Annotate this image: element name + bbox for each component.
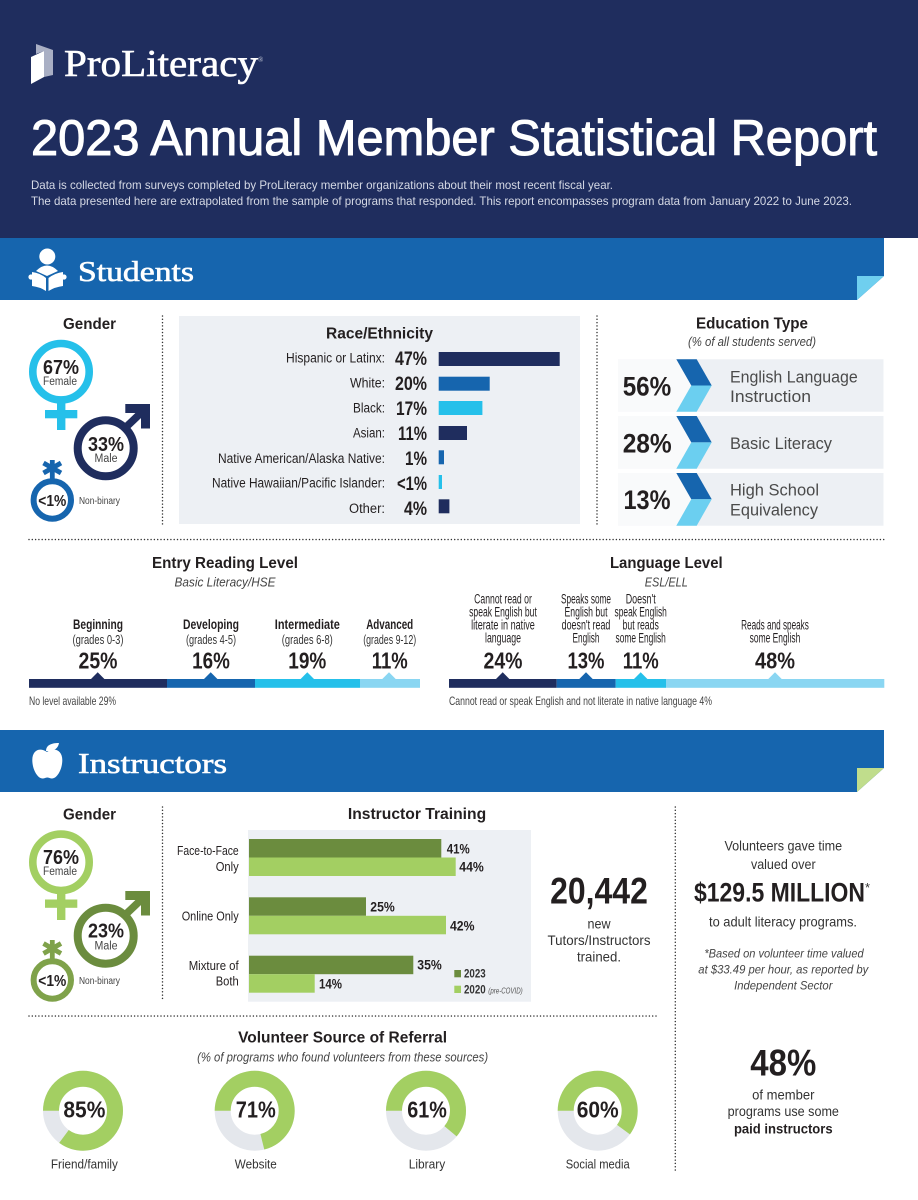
stat: volunteer value — [694, 838, 870, 992]
level descriptions: Doesn't — [626, 591, 656, 606]
panel: race and ethnicity chart — [179, 316, 580, 524]
row labels: Hispanic or Latinx: — [286, 351, 385, 366]
row values: 11% — [398, 424, 427, 445]
male symbol: Male — [94, 453, 118, 465]
row: High School Equivalency — [618, 473, 884, 526]
row labels: Native American/Alaska Native: — [218, 451, 385, 466]
row: Basic Literacy — [618, 416, 884, 469]
heading: Education Type — [696, 316, 808, 333]
donut: website: 71% — [236, 1096, 276, 1122]
male symbol: Male — [94, 940, 118, 952]
row: High School Equivalency: Equivalency — [730, 501, 818, 520]
donut: social media: 60% — [577, 1096, 619, 1122]
legend: 2023 — [464, 969, 486, 981]
donut: website: Website — [235, 1156, 277, 1171]
intro text: Data is collected from surveys completed by ProLiteracy member organizations about their most recent fiscal year. — [31, 178, 613, 192]
level descriptions: speak English but — [469, 604, 537, 619]
level labels: Advanced — [366, 616, 413, 632]
row values: 47% — [395, 349, 427, 370]
row: Basic Literacy: Basic Literacy — [730, 434, 832, 453]
row labels: Online Only — [182, 908, 239, 923]
level descriptions — [469, 591, 809, 645]
level descriptions: language — [485, 630, 521, 645]
bars — [249, 839, 456, 993]
level labels: Developing — [183, 616, 239, 632]
level descriptions: but reads — [623, 617, 659, 632]
level percentages — [78, 647, 408, 673]
row labels — [212, 351, 385, 516]
non-binary symbol: Non-binary — [79, 976, 120, 987]
bar values: 41% — [447, 841, 470, 856]
footnote: at $33.49 per hour, as reported by — [698, 962, 869, 976]
icon: apple — [32, 743, 62, 779]
bar values: 35% — [417, 958, 442, 973]
stat: paid instructors: 48% — [750, 1043, 816, 1084]
heading: Language Level — [610, 555, 723, 572]
row labels: White: — [350, 376, 385, 390]
heading: Race/Ethnicity — [326, 326, 433, 342]
female symbol: 67% — [43, 357, 79, 379]
level descriptions: Speaks some — [561, 591, 611, 606]
subtitle: (% of all students served) — [688, 334, 816, 349]
stat: paid instructors: of member — [752, 1086, 815, 1102]
level percentages: 11% — [623, 647, 659, 673]
row values: <1% — [397, 474, 427, 495]
panel: volunteer source of referral — [51, 1030, 630, 1171]
bar values: 44% — [459, 860, 484, 875]
bars — [439, 352, 560, 513]
donut: library: Library — [409, 1156, 446, 1171]
row: English Language Instruction: Instruction — [730, 387, 811, 406]
level percentages: 24% — [484, 647, 522, 673]
stat: volunteer value: Volunteers gave time — [724, 838, 842, 854]
stat: paid instructors — [728, 1043, 839, 1136]
level descriptions: doesn't read — [562, 617, 610, 632]
stat: volunteer value: valued over — [751, 856, 816, 872]
level descriptions: literate in native — [471, 617, 535, 632]
panel: student gender — [33, 316, 150, 519]
row values: 20% — [395, 374, 427, 395]
bar values: 25% — [370, 900, 395, 915]
level descriptions: Reads and speaks — [741, 617, 809, 632]
donut: social media — [566, 1079, 630, 1171]
donut: friend/family — [51, 1079, 118, 1171]
section banner: Instructors — [0, 730, 884, 792]
level labels: Intermediate — [275, 616, 340, 632]
stat: paid instructors: programs use some — [728, 1103, 839, 1119]
stat: volunteer value: * — [865, 880, 870, 895]
stat: tutors trained: new — [588, 915, 611, 931]
row labels: Mixture of — [189, 958, 239, 973]
row values — [395, 349, 427, 520]
level descriptions: speak English — [615, 604, 667, 619]
panel: entry reading level — [29, 555, 420, 708]
note: No level available 29% — [29, 694, 116, 708]
intro text — [31, 178, 852, 208]
subtitle: (% of programs who found volunteers from these sources) — [197, 1050, 488, 1065]
panel: instructor gender — [33, 806, 150, 999]
level percentages: 11% — [372, 647, 408, 673]
row values: 1% — [405, 449, 427, 470]
footnote: *Based on volunteer time valued — [704, 946, 864, 960]
row labels: Face-to-Face — [177, 843, 239, 858]
female symbol — [33, 834, 89, 920]
row: Basic Literacy: 28% — [623, 428, 672, 458]
donut: website — [223, 1079, 287, 1171]
intro text: The data presented here are extrapolated from the sample of programs that responded. This report encompasses program data from January 2022 to June 2023. — [31, 194, 852, 208]
female symbol — [33, 344, 89, 430]
row: High School Equivalency: 13% — [624, 485, 670, 515]
non-binary symbol: Non-binary — [79, 496, 120, 507]
stat: tutors trained: Tutors/Instructors — [548, 932, 650, 948]
male symbol: 33% — [88, 434, 124, 456]
male symbol — [78, 404, 150, 476]
heading: Gender — [63, 806, 116, 823]
non-binary symbol: <1% — [38, 973, 66, 990]
heading: Gender — [63, 316, 116, 333]
non-binary symbol — [34, 940, 120, 999]
icon: student reading — [28, 248, 67, 291]
male symbol — [78, 891, 150, 964]
bar values: 14% — [319, 977, 342, 992]
level descriptions: English but — [564, 604, 608, 619]
section banner: Students — [0, 238, 884, 300]
section heading: Students — [78, 256, 194, 288]
subtitle: ESL/ELL — [645, 575, 688, 590]
level labels — [72, 616, 416, 647]
segmented bar — [449, 672, 884, 688]
female symbol: Female — [43, 866, 77, 878]
stat: volunteer value: $129.5 MILLION — [694, 878, 865, 908]
legend: 2020 — [464, 984, 486, 996]
row: High School Equivalency: High School — [730, 481, 819, 500]
bar values: 42% — [450, 918, 474, 933]
row: English Language Instruction: English Language — [730, 367, 858, 386]
donut: library: 61% — [407, 1096, 447, 1122]
row labels: Black: — [353, 400, 385, 416]
row labels: Native Hawaiian/Pacific Islander: — [212, 476, 385, 490]
note: Cannot read or speak English and not literate in native language 4% — [449, 694, 712, 708]
non-binary symbol: <1% — [38, 493, 66, 510]
row values: 4% — [404, 499, 427, 520]
main title: 2023 Annual Member Statistical Report — [31, 110, 877, 166]
non-binary symbol — [34, 460, 120, 519]
panel: instructor training chart — [177, 806, 531, 1002]
stat: tutors trained: 20,442 — [550, 870, 648, 911]
level percentages: 19% — [288, 647, 326, 673]
section heading: Instructors — [78, 748, 227, 780]
row labels: Asian: — [353, 426, 385, 440]
icon: ProLiteracy book logo — [31, 44, 53, 84]
donut: friend/family: Friend/family — [51, 1156, 118, 1171]
level labels: Beginning — [73, 616, 123, 632]
donut: social media: Social media — [566, 1156, 630, 1171]
level descriptions: some English — [616, 630, 666, 645]
female symbol: Female — [43, 376, 77, 388]
level labels: (grades 6-8) — [282, 632, 333, 647]
level labels: (grades 9-12) — [363, 632, 416, 647]
heading: Instructor Training — [348, 806, 486, 823]
heading: Volunteer Source of Referral — [238, 1030, 447, 1047]
legend — [454, 969, 523, 996]
stat: tutors trained — [548, 870, 650, 965]
donut: library — [394, 1079, 458, 1171]
stat: paid instructors: paid instructors — [734, 1120, 833, 1136]
footnote — [698, 946, 869, 992]
footnote: Independent Sector — [734, 978, 833, 992]
level descriptions: some English — [750, 630, 800, 645]
row values: 17% — [396, 399, 427, 420]
bar values — [319, 841, 484, 992]
level percentages: 13% — [568, 647, 604, 673]
donut: friend/family: 85% — [63, 1096, 105, 1122]
row labels: Only — [216, 859, 239, 874]
registered mark: ® — [258, 56, 264, 64]
level labels: (grades 4-5) — [186, 632, 236, 647]
stat: tutors trained: trained. — [577, 949, 621, 965]
female symbol: 76% — [43, 847, 79, 869]
row: English Language Instruction: 56% — [623, 372, 671, 402]
male symbol: 23% — [88, 921, 124, 943]
level percentages — [484, 647, 795, 673]
row labels: Other: — [349, 501, 385, 516]
header banner — [0, 0, 918, 238]
stat: volunteer value: to adult literacy programs. — [709, 914, 857, 930]
legend: (pre-COVID) — [488, 985, 523, 995]
level labels: (grades 0-3) — [72, 632, 124, 647]
row: English Language Instruction — [618, 359, 884, 412]
row labels: Both — [216, 974, 239, 989]
level descriptions: English — [572, 630, 600, 645]
panel: education type — [618, 316, 884, 526]
level percentages: 48% — [755, 647, 795, 673]
heading: Entry Reading Level — [152, 555, 298, 572]
panel: language level — [449, 555, 884, 708]
row labels — [177, 843, 239, 989]
level percentages: 16% — [192, 647, 230, 673]
level percentages: 25% — [78, 647, 118, 673]
segmented bar — [29, 672, 420, 688]
logo wordmark: ProLiteracy — [64, 43, 258, 85]
subtitle: Basic Literacy/HSE — [174, 575, 276, 590]
level descriptions: Cannot read or — [474, 591, 532, 606]
